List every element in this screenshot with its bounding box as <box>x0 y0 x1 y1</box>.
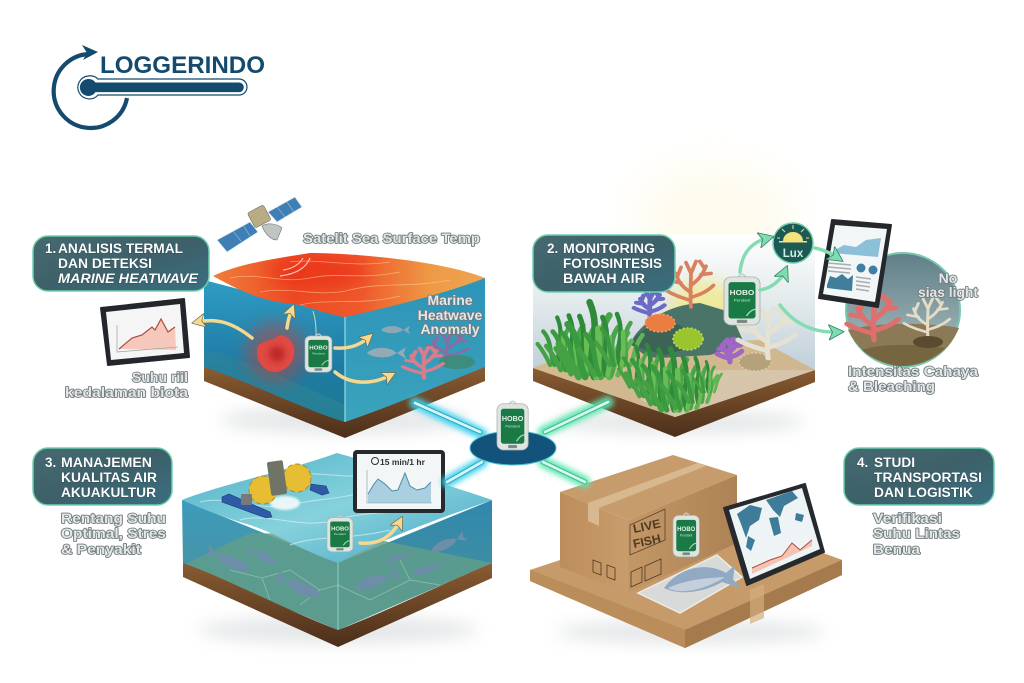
left water <box>182 500 338 630</box>
rock <box>632 303 745 358</box>
water surface <box>182 453 492 563</box>
callout 1: tablet temperature chart <box>101 299 189 365</box>
pallet <box>530 530 842 648</box>
arrow <box>360 521 400 543</box>
heading 3 pill: AKUAKULTUR <box>61 485 156 500</box>
icon: Lux sensor: Lux <box>783 248 804 260</box>
fish packet <box>638 555 742 613</box>
sea floor <box>183 533 492 630</box>
label: cross-continent verification: Suhu Lintas <box>873 525 960 541</box>
soil <box>533 368 815 437</box>
heading 4 pill: 4. <box>857 455 868 470</box>
label: optimal temperature range <box>61 510 166 557</box>
panel 3: aquaculture block <box>182 453 492 647</box>
tablet with world map <box>724 484 824 585</box>
callout 3: tablet 15 min / 1 hr <box>353 450 445 513</box>
label: cross-continent verification: Verifikasi <box>873 510 942 526</box>
label: marine heatwave anomaly: Marine <box>427 292 473 308</box>
label: optimal temperature range: Optimal, Stres <box>61 525 166 541</box>
soil <box>204 367 485 438</box>
label: marine heatwave anomaly <box>418 292 483 337</box>
panel 2: underwater photosynthesis block <box>533 235 815 437</box>
panel 4: transport and logistics: LIVE <box>632 516 662 536</box>
heading 4 pill <box>844 448 994 505</box>
label: marine heatwave anomaly: Heatwave <box>418 307 483 323</box>
heading 3 pill: 3. <box>45 455 56 470</box>
label: real temperature at biota depth <box>65 369 188 400</box>
label: satellite SST: Satelit Sea Surface Temp <box>303 230 480 246</box>
right water <box>338 500 492 630</box>
heading 2 pill <box>533 235 675 292</box>
heading 1 pill: ANALISIS TERMAL <box>58 241 183 256</box>
fish and coral <box>381 326 410 334</box>
label: real temperature at biota depth: kedalaman biota <box>65 384 188 400</box>
water right face <box>345 278 485 424</box>
heading 1 pill: 1. <box>45 241 56 256</box>
fish <box>204 531 467 604</box>
heading 2 pill: FOTOSINTESIS <box>563 256 662 271</box>
label: marine heatwave anomaly: Anomaly <box>420 321 480 337</box>
label: cross-continent verification: Benua <box>873 541 920 557</box>
aerator <box>222 460 329 518</box>
heading 3 pill: KUALITAS AIR <box>61 470 157 485</box>
label: light intensity and bleaching: & Bleaching <box>848 378 935 394</box>
logo: Loggerindo <box>54 45 265 128</box>
label: light intensity and bleaching: Intensitas Cahaya <box>848 363 978 379</box>
label: no sias light: sias light <box>918 284 978 300</box>
icon: Lux sensor <box>773 223 813 263</box>
panel 4: transport and logistics <box>530 455 842 648</box>
callout 3: tablet 15 min / 1 hr: 15 min/1 hr <box>380 457 426 467</box>
sea surface temperature <box>213 253 485 317</box>
heading 4 pill: STUDI <box>874 455 915 470</box>
arrows <box>197 309 391 382</box>
heading 2 pill: BAWAH AIR <box>563 271 645 286</box>
heading 4 pill: TRANSPORTASI <box>874 470 982 485</box>
heading 1 pill <box>33 236 209 291</box>
water left face <box>204 280 345 424</box>
seagrass left <box>538 302 642 377</box>
anomaly hotspot <box>246 322 306 382</box>
heading 1 pill: MARINE HEATWAVE <box>58 271 199 286</box>
label: optimal temperature range: Rentang Suhu <box>61 510 166 526</box>
heading 3 pill <box>33 448 172 505</box>
back wall <box>533 235 815 416</box>
heading 2 pill: 2. <box>547 241 558 256</box>
icon: satellite <box>217 197 302 252</box>
callout: bleaching circle <box>846 253 960 367</box>
heading 3 pill: MANAJEMEN <box>61 455 152 470</box>
panel 1: marine heatwave block <box>197 253 485 438</box>
label: real temperature at biota depth: Suhu riil <box>132 369 188 385</box>
sand <box>533 340 815 417</box>
soil <box>183 563 492 647</box>
logo: Loggerindo: LOGGERINDO <box>100 52 265 79</box>
heading 2 pill: MONITORING <box>563 241 655 256</box>
corals <box>666 261 714 307</box>
label: no sias light: No <box>939 270 957 286</box>
heading 4 pill: DAN LOGISTIK <box>874 485 973 500</box>
heading 1 pill: DAN DETEKSI <box>58 256 152 271</box>
dashboard tablet <box>819 220 891 307</box>
label: no sias light <box>918 270 978 300</box>
sensor cable <box>313 311 316 335</box>
panel 4: transport and logistics: FISH <box>632 531 662 551</box>
label: light intensity and bleaching <box>848 363 978 394</box>
green arrows <box>740 238 838 332</box>
label: cross-continent verification <box>873 510 960 557</box>
label: optimal temperature range: & Penyakit <box>61 541 141 557</box>
box <box>560 455 737 520</box>
central hub with connectors <box>415 401 608 482</box>
seagrass front <box>619 345 722 410</box>
